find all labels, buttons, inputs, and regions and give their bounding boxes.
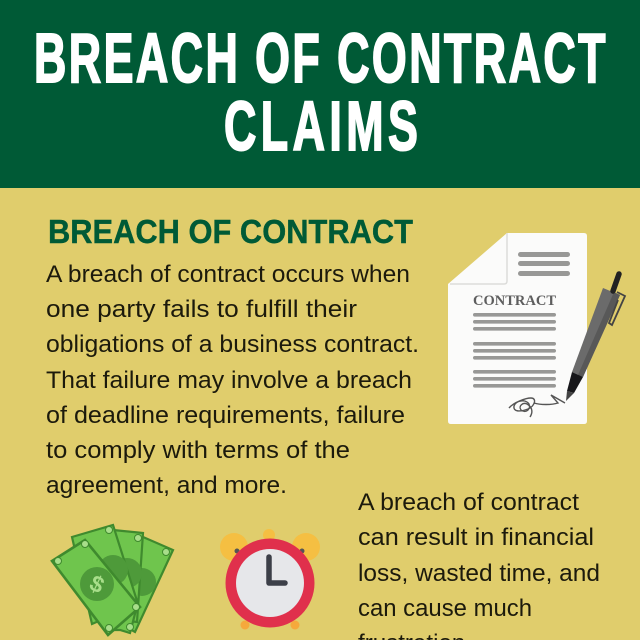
icon: money bills — [52, 525, 173, 635]
title banner — [0, 0, 640, 188]
signature — [509, 395, 565, 417]
heading: breach of contract: BREACH OF CONTRACT — [48, 213, 413, 250]
title banner: CLAIMS — [224, 88, 418, 165]
icon: alarm clock — [220, 529, 320, 630]
text block: definition — [46, 261, 419, 499]
text block: definition: agreement, and more. — [46, 472, 287, 499]
text block: consequences — [358, 489, 600, 640]
text block: definition: A breach of contract occurs when — [46, 261, 410, 288]
icon: contract document with pen: CONTRACT — [473, 293, 556, 309]
text block: definition: one party fails to fulfill their — [46, 296, 357, 323]
text block: consequences: A breach of contract — [358, 489, 579, 516]
text block: definition: to comply with terms of the — [46, 437, 350, 464]
text block: definition: obligations of a business contract. — [46, 331, 419, 358]
text block: definition: That failure may involve a breach — [46, 367, 412, 394]
text block: definition: of deadline requirements, failure — [46, 402, 405, 429]
icon: money bills: $ — [86, 570, 108, 599]
title banner: BREACH OF CONTRACT — [34, 20, 606, 97]
icon: contract document with pen — [448, 233, 625, 424]
text block: consequences: loss, wasted time, and — [358, 560, 600, 587]
text block: consequences: can result in financial — [358, 524, 594, 551]
text block: consequences: can cause much — [358, 595, 532, 622]
pen — [566, 274, 625, 401]
